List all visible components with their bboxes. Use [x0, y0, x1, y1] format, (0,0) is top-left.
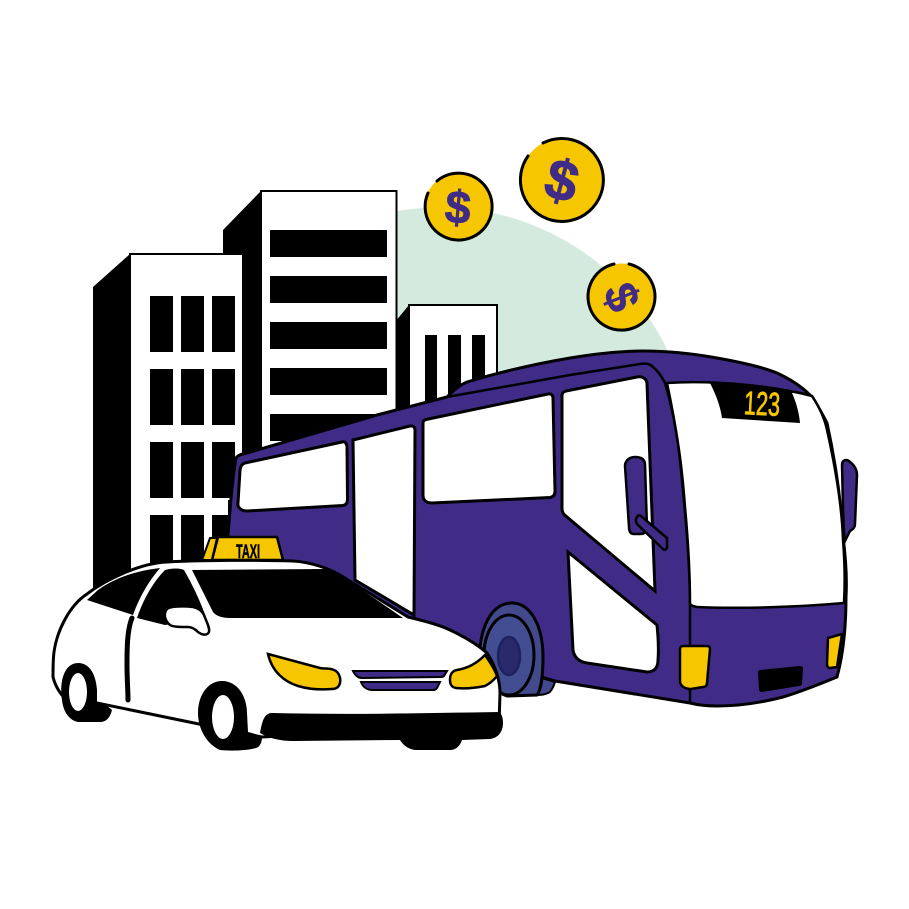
background: green circle	[397, 207, 672, 420]
taxi door line	[127, 618, 132, 700]
coin: large top: $	[538, 146, 585, 216]
taxi underside shadow	[260, 712, 503, 750]
bus right headlight	[827, 634, 842, 668]
taxi roof sign: TAXI	[236, 542, 260, 563]
coin: small right	[588, 264, 656, 330]
bus destination sign	[710, 383, 807, 423]
taxi side mirror	[165, 606, 209, 635]
bus windows	[238, 377, 658, 672]
bus plate	[758, 666, 803, 692]
coin: large top	[520, 138, 604, 222]
bus body	[225, 351, 846, 706]
taxi front wheel	[198, 681, 262, 751]
building: tall middle	[223, 191, 396, 500]
taxi body	[53, 560, 500, 737]
taxi side windows	[87, 568, 207, 625]
bus destination sign: 123	[743, 384, 781, 423]
taxi rear wheel	[61, 663, 112, 722]
taxi headlight right	[450, 655, 497, 688]
bus left headlight	[680, 646, 710, 689]
coin: small left	[424, 173, 492, 240]
coin: small right: $	[593, 275, 651, 319]
bus mirror right	[842, 460, 857, 541]
taxi roof sign	[202, 537, 283, 563]
bus wheel	[480, 603, 555, 696]
taxi headlight left	[268, 654, 340, 689]
taxi	[53, 537, 503, 751]
taxi windshield	[192, 569, 403, 618]
building: left	[93, 254, 248, 620]
taxi grille	[353, 671, 447, 690]
coin: small left: $	[443, 180, 473, 234]
building: right short	[395, 305, 497, 420]
bus windshield	[667, 382, 845, 608]
bus	[225, 351, 857, 706]
bus mirror left	[625, 457, 667, 550]
bus roof and front pillar line	[447, 364, 690, 703]
